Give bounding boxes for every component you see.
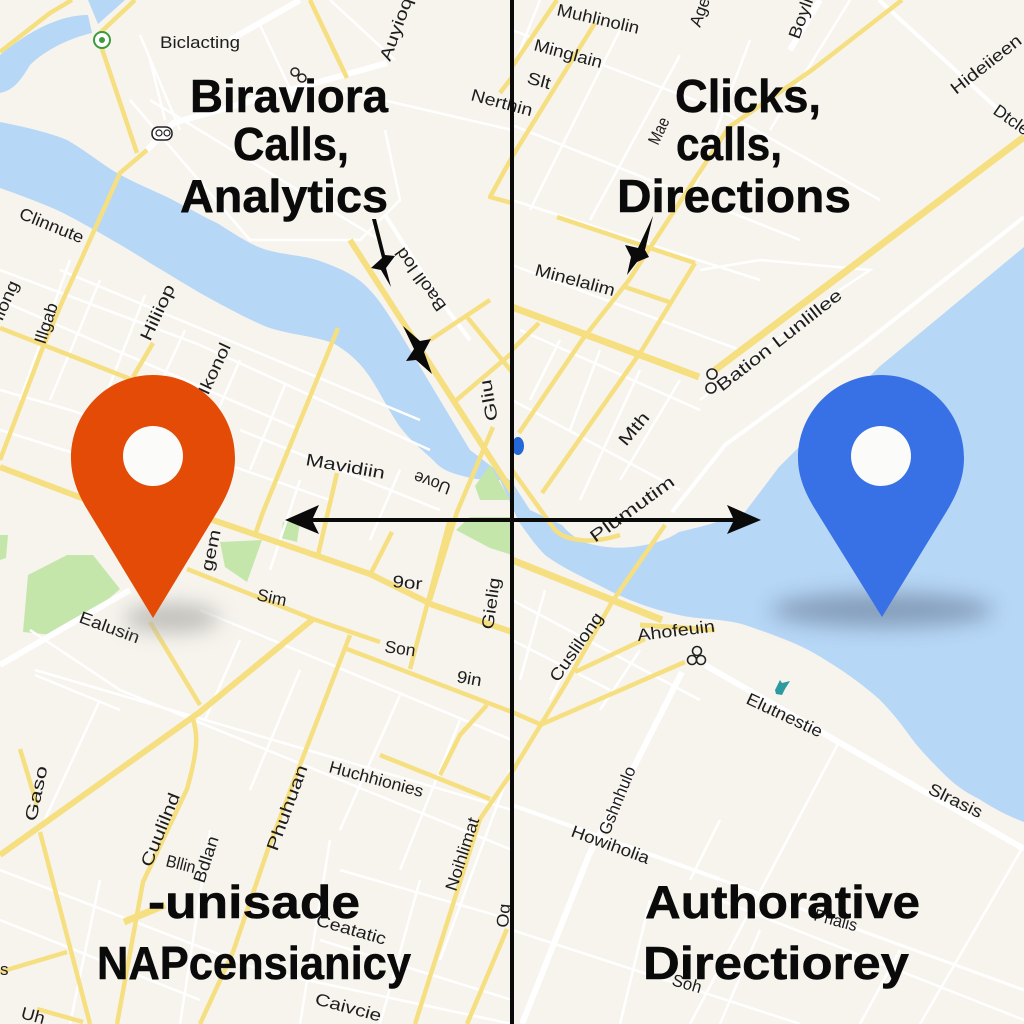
street labels, top left: Nerthin bbox=[469, 86, 535, 120]
street labels, top left: Mavidiin bbox=[304, 450, 386, 483]
street labels, bottom left: s bbox=[0, 960, 8, 979]
street labels, bottom left: Caivcie bbox=[313, 990, 384, 1024]
left pin shadow bbox=[124, 603, 220, 633]
icon: orange location pin bbox=[71, 375, 235, 618]
heading: bottom right: Authorative bbox=[645, 876, 920, 928]
street labels, bottom right: Elutnestie bbox=[743, 689, 826, 741]
street labels, bottom right: Phalis bbox=[812, 906, 859, 935]
street labels, top left: Illgab bbox=[31, 300, 62, 346]
icon: small glyph near title bbox=[291, 68, 306, 82]
street labels, bottom left: Sim bbox=[255, 585, 288, 610]
heading: bottom left: -unisade bbox=[148, 876, 360, 928]
icon: teal marker bbox=[775, 680, 790, 695]
street labels, top left: Baoll lod bbox=[391, 244, 450, 315]
street labels, bottom right: Slrasis bbox=[925, 780, 986, 822]
street labels, bottom left: Ealusin bbox=[77, 608, 142, 647]
heading: top left: Analytics bbox=[180, 170, 388, 222]
street labels, top left: Biclacting bbox=[160, 33, 240, 52]
heading: top left: Biraviora bbox=[190, 70, 388, 122]
street labels, bottom left: Gielig bbox=[478, 576, 504, 631]
heading: top right bbox=[617, 70, 851, 222]
street labels, bottom left: 9in bbox=[455, 667, 483, 690]
icon: clover junction marker bbox=[688, 646, 706, 664]
icon: road shield glyph bbox=[152, 127, 172, 140]
right pin shadow bbox=[770, 593, 994, 627]
street labels, bottom left: Gaso bbox=[21, 764, 52, 823]
heading: top right: Clicks, bbox=[675, 70, 821, 122]
street labels, top left: Hiliiop bbox=[136, 281, 179, 344]
street labels, bottom left: Noihlimat bbox=[442, 815, 483, 893]
street labels, bottom left bbox=[0, 528, 514, 1024]
street labels, top left: Auyioq bbox=[376, 0, 416, 63]
street labels, bottom right: Gshnhulo bbox=[595, 764, 640, 837]
street labels, bottom left: Bllin bbox=[164, 851, 198, 877]
heading: top right: calls, bbox=[676, 118, 782, 170]
street labels, top right: Boyll bbox=[785, 0, 817, 41]
vertical divider line bbox=[510, 0, 514, 1024]
street labels, top right: Minglain bbox=[532, 36, 604, 72]
double-headed horizontal arrow bbox=[285, 505, 761, 534]
street labels, top left: Ikonol bbox=[194, 340, 235, 398]
street labels, bottom right bbox=[546, 609, 986, 997]
major yellow roads bbox=[0, 137, 1024, 922]
street labels, top left: Uove bbox=[411, 467, 453, 498]
arrow: from left heading bbox=[371, 219, 395, 287]
icon: green map marker bbox=[94, 32, 110, 48]
street labels, top right: Muhlinolin bbox=[555, 0, 641, 38]
arrow: second left road marker bbox=[403, 326, 432, 374]
street labels, top right bbox=[525, 0, 1024, 546]
street labels, top right: Hideiieen bbox=[947, 31, 1024, 98]
heading: top right: Directions bbox=[617, 170, 851, 222]
street labels, bottom right: Ahofeuin bbox=[636, 617, 716, 645]
street labels, bottom left: Son bbox=[383, 637, 417, 660]
street labels, bottom left: Bdlan bbox=[190, 834, 223, 885]
street labels, bottom right: Howiholia bbox=[569, 822, 653, 868]
street labels, top right: Plumutim bbox=[586, 472, 678, 546]
street labels, bottom left: Cuulilnd bbox=[137, 790, 184, 869]
street labels, top right: Slt bbox=[525, 69, 553, 93]
street labels, bottom left: Og bbox=[493, 903, 514, 928]
icon: blue location dot bbox=[512, 437, 524, 455]
arrow: from right heading bbox=[625, 216, 653, 275]
street labels, bottom right: Cuslilong bbox=[546, 609, 607, 685]
street labels, bottom left: Ceatatic bbox=[314, 911, 389, 949]
street labels, top left bbox=[0, 0, 535, 498]
heading: bottom right bbox=[643, 876, 920, 989]
parks bbox=[0, 465, 512, 635]
street labels, bottom left: 9or bbox=[392, 572, 424, 594]
street labels, bottom left: Huchhionies bbox=[327, 758, 426, 801]
heading: bottom right: Directiorey bbox=[643, 937, 909, 989]
street labels, bottom left: Phuhuan bbox=[263, 762, 312, 853]
street labels, top left: Clinnute bbox=[17, 204, 87, 247]
heading: bottom left: NAPcensianicy bbox=[97, 937, 411, 989]
street labels, top right: Mae bbox=[644, 114, 673, 148]
street labels, top left: Gliu bbox=[476, 378, 502, 423]
street labels, bottom left: gem bbox=[197, 528, 225, 573]
icon: junction glyph at Bation bbox=[706, 369, 717, 393]
heading: top left: Calls, bbox=[233, 118, 349, 170]
street labels, top right: Bation Lunlillee bbox=[713, 285, 846, 395]
heading: top left bbox=[180, 70, 388, 222]
street labels, bottom right: Soh bbox=[670, 971, 704, 997]
icon: blue location pin bbox=[798, 375, 964, 617]
street labels, top right: Minelalim bbox=[533, 261, 617, 300]
street labels, top right: Mth bbox=[615, 408, 653, 450]
heading: bottom left bbox=[97, 876, 411, 989]
